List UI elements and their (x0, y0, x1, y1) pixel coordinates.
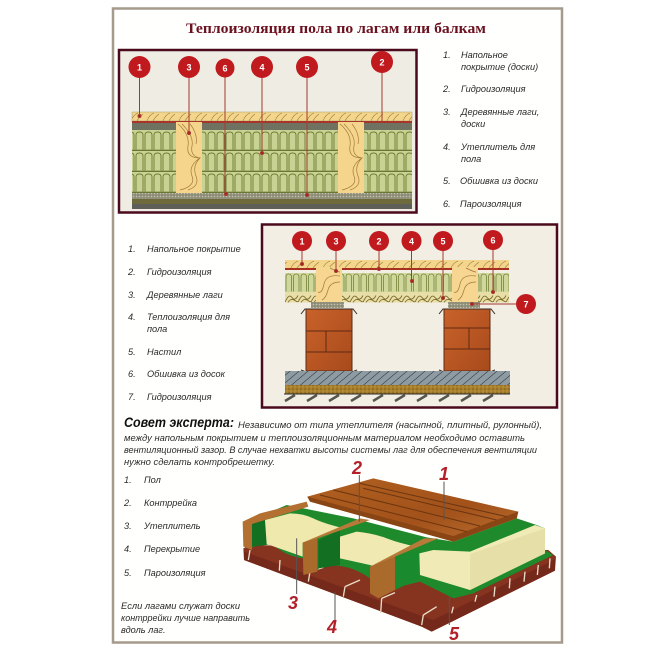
marker 6 (216, 58, 234, 78)
marker 4 (402, 231, 422, 251)
legend: bottom diagram: 4. (124, 544, 132, 554)
legend: bottom diagram: Контррейка (144, 498, 197, 508)
marker 2 (371, 51, 393, 73)
number 2: 2 (351, 458, 362, 478)
marker 1: 1 (137, 62, 142, 72)
number 3: 3 (288, 593, 298, 613)
marker 1: 1 (299, 236, 305, 246)
marker 4: 4 (409, 236, 414, 246)
marker 3 (178, 56, 200, 78)
waterproofing layer (132, 121, 412, 130)
insulation block left (265, 513, 344, 557)
brick pier right (439, 309, 495, 372)
legend: middle diagram (127, 244, 241, 402)
marker 2: 2 (376, 236, 382, 246)
expert tip: вентиляционный зазор. В случае нехватки высоты системы лаг для обеспечения вентиляции (124, 445, 538, 456)
legend: bottom diagram: Перекрытие (144, 544, 200, 554)
legend: middle diagram: Гидроизоляция (147, 267, 212, 277)
legend: top diagram: покрытие (доски) (461, 62, 538, 72)
insulation layer (285, 273, 509, 292)
note (121, 601, 250, 635)
joist middle (303, 518, 370, 575)
marker 3 (326, 231, 346, 251)
floor boards (307, 478, 518, 542)
legend: top diagram: 6. (443, 199, 451, 209)
legend: top diagram: Обшивка из доски (460, 176, 538, 186)
marker 4 (251, 56, 273, 78)
note: вдоль лаг. (121, 625, 166, 635)
expert tip (124, 414, 542, 468)
legend: middle diagram: Гидроизоляция (147, 392, 212, 402)
note: Если лагами служат доски (121, 601, 240, 611)
legend: top diagram: пола (461, 154, 481, 164)
insulation block right (419, 525, 545, 590)
wooden joist left (176, 122, 202, 193)
legend: top diagram: Напольное (461, 50, 508, 60)
joist left (316, 267, 342, 302)
legend: middle diagram: 5. (128, 347, 136, 357)
gasket pads (311, 302, 480, 308)
callout lines (138, 65, 382, 196)
legend: top diagram: Деревянные лаги, (460, 107, 539, 117)
legend: middle diagram: Теплоизоляция для (147, 312, 230, 322)
callout lines (300, 243, 516, 306)
legend: bottom diagram: 1. (124, 475, 132, 485)
marker 6: 6 (222, 64, 228, 74)
3D floor illustration (243, 475, 556, 632)
marker 6 (483, 230, 503, 250)
marker 7 (516, 294, 536, 314)
marker 5 (296, 56, 318, 78)
marker 4: 4 (259, 62, 265, 72)
note: контррейки лучше направить (121, 613, 250, 623)
legend: top diagram (442, 50, 539, 209)
legend: top diagram: 2. (442, 84, 451, 94)
leader 5 (448, 597, 451, 625)
marker 5 (433, 231, 453, 251)
insulation block middle (340, 532, 417, 575)
marker 1 (292, 231, 312, 251)
marker 2 (369, 231, 389, 251)
legend: top diagram: 3. (443, 107, 451, 117)
legend: bottom diagram: Пароизоляция (144, 568, 206, 578)
leader 2 (358, 475, 361, 522)
legend: middle diagram: 2. (127, 267, 136, 277)
legend: middle diagram: 7. (128, 392, 136, 402)
marker 3: 3 (186, 62, 192, 72)
floor covering (285, 260, 509, 268)
page frame (113, 8, 562, 642)
title: Теплоизоляция пола по лагам или балкам (186, 21, 486, 37)
marker 7: 7 (523, 300, 529, 310)
marker 1 (128, 56, 150, 78)
legend: bottom diagram: 2. (123, 498, 132, 508)
legend: bottom diagram: Пол (144, 475, 161, 485)
legend: middle diagram: Обшивка из досок (147, 369, 226, 379)
marker 6: 6 (490, 236, 496, 246)
joist right (452, 267, 478, 302)
marker 3: 3 (333, 236, 339, 246)
legend: top diagram: 5. (443, 176, 451, 186)
joist left (243, 502, 308, 550)
legend: top diagram: Пароизоляция (460, 199, 522, 209)
legend: bottom diagram (123, 475, 206, 578)
expert tip: между напольным покрытием и теплоизоляционным материалом необходимо оставить (124, 433, 525, 444)
number 5: 5 (449, 624, 460, 644)
legend: middle diagram: 6. (128, 369, 136, 379)
ground layers (284, 371, 510, 401)
brick pier left (301, 309, 357, 372)
legend: bottom diagram: Утеплитель (143, 521, 201, 531)
legend: middle diagram: 3. (128, 290, 136, 300)
panel: middle cross-section diagram (262, 224, 557, 408)
leader 3 (295, 538, 298, 594)
leader 1 (442, 482, 445, 520)
legend: top diagram: Гидроизоляция (461, 84, 526, 94)
legend: middle diagram: Настил (147, 347, 181, 357)
waterproofing line (285, 268, 509, 270)
legend: middle diagram: пола (147, 324, 167, 334)
legend: bottom diagram: 5. (124, 568, 132, 578)
green vapor barrier (250, 505, 553, 598)
insulation (132, 130, 412, 193)
legend: middle diagram: Напольное покрытие (147, 244, 241, 254)
marker 5: 5 (304, 62, 310, 72)
expert tip: Совет эксперта: (124, 414, 234, 430)
marker 5: 5 (440, 236, 446, 246)
lower fill layer (285, 292, 509, 302)
legend: bottom diagram: 3. (124, 521, 132, 531)
number 1: 1 (439, 464, 449, 484)
panel: top cross-section diagram (119, 50, 416, 212)
legend: middle diagram: 1. (128, 244, 136, 254)
joist right (370, 538, 438, 598)
legend: middle diagram: 4. (128, 312, 136, 322)
vapor barrier and sheathing (132, 193, 412, 209)
floor board layer (132, 112, 412, 121)
marker 2: 2 (379, 58, 385, 68)
leader 4 (333, 592, 336, 620)
brick base (243, 545, 556, 632)
number 4: 4 (326, 617, 337, 637)
legend: top diagram: Утеплитель для (460, 142, 535, 152)
legend: middle diagram: Деревянные лаги (146, 290, 223, 300)
wooden joist right (338, 122, 364, 193)
legend: top diagram: доски (461, 119, 485, 129)
expert tip: Независимо от типа утеплителя (насыпной, плитный, рулонный), (238, 420, 542, 431)
legend: top diagram: 4. (443, 142, 451, 152)
expert tip: нужно сделать контробрешетку. (124, 457, 275, 468)
legend: top diagram: 1. (443, 50, 451, 60)
